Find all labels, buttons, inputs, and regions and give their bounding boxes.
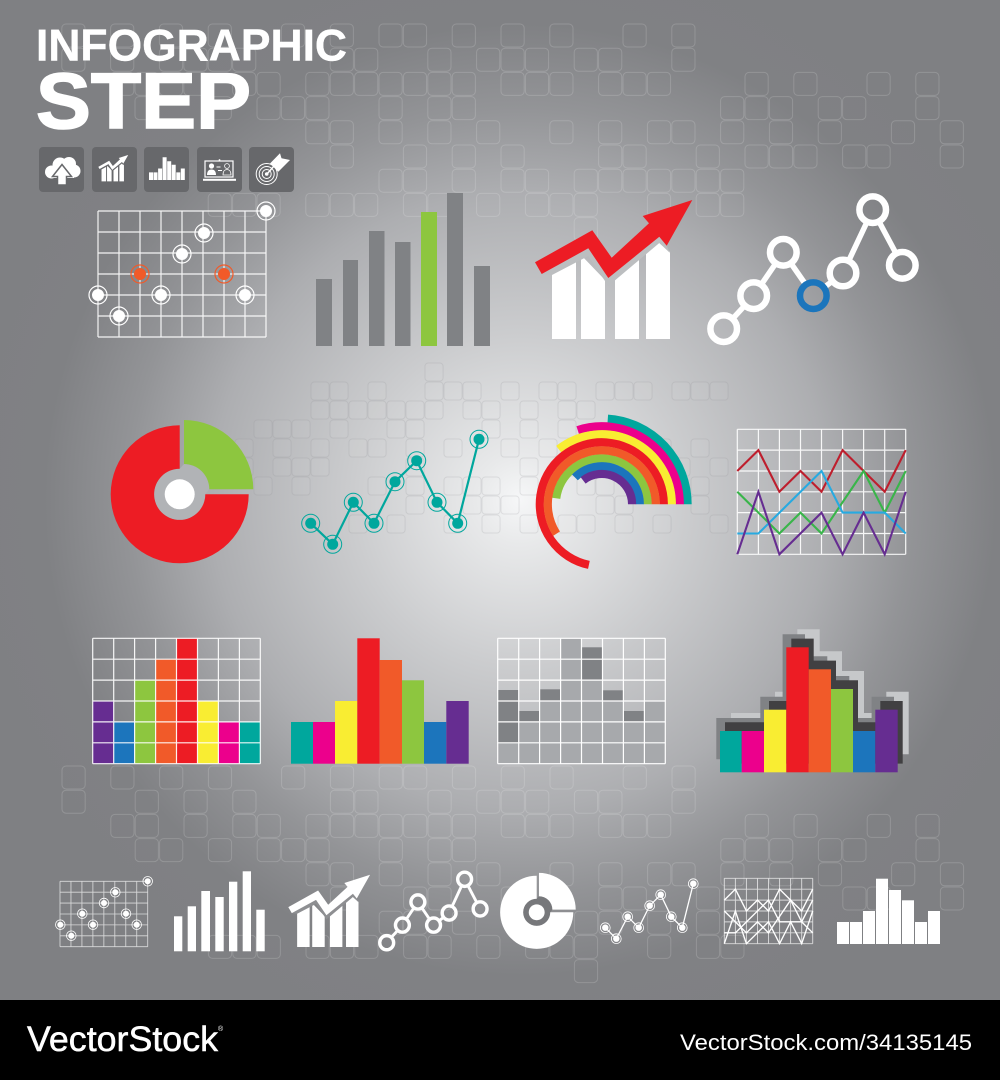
chart: ring chain line (710, 196, 916, 342)
line chart grid (737, 429, 906, 554)
chart: teal line with points (302, 430, 488, 553)
green series (737, 471, 906, 534)
dark gray tops (498, 647, 644, 743)
background pattern: top squares (62, 24, 963, 241)
icon row (39, 147, 294, 192)
chart: gray bars on grid (498, 638, 665, 764)
white rings (710, 196, 916, 342)
donut center ring (154, 464, 209, 520)
orange scatter points (131, 265, 233, 283)
dark red series (737, 450, 906, 492)
chart: colour histogram (291, 638, 469, 764)
title (36, 22, 347, 145)
white bars (552, 242, 670, 339)
footer logo text: VectorStock (27, 1020, 219, 1059)
teal line (311, 439, 479, 544)
chart: red and green donut (111, 420, 253, 563)
footer band (0, 1000, 1000, 1080)
mini icon: rising arrow chart (288, 875, 370, 947)
scatter grid lines (98, 211, 266, 337)
icon: histogram (144, 147, 189, 192)
mid shadow layer (716, 634, 894, 759)
footer registered mark: ® (218, 1025, 224, 1033)
chart: colour bars on grid (93, 638, 260, 764)
blue ring (800, 282, 827, 309)
light shadow layer (731, 629, 909, 754)
background pattern: middle squares (235, 363, 728, 533)
blue series (737, 471, 906, 534)
mini icon: bars (174, 871, 265, 951)
gray grid lines (498, 638, 665, 764)
title line: STEP: STEP (36, 56, 251, 145)
icon: laptop video call (197, 147, 242, 192)
red arrow (535, 200, 692, 278)
mini icon: ring chain (380, 872, 487, 950)
chart: layered colour bars with shadows (716, 629, 909, 772)
mini icon: line with points (600, 879, 698, 944)
dark shadow layer (725, 639, 903, 764)
mini icon: multi-line grid (724, 878, 813, 944)
arrow shadow (542, 237, 670, 286)
title line: INFOGRAPHIC: INFOGRAPHIC (36, 22, 347, 70)
chart: multi-line grid (737, 429, 906, 554)
medium gray columns (498, 638, 665, 764)
mini icon: donut (500, 873, 576, 949)
chart: scatter grid (89, 202, 275, 337)
mini icon: scatter grid (56, 876, 152, 947)
background pattern: bottom squares (62, 766, 964, 983)
purple series (737, 492, 906, 554)
teal points (305, 434, 484, 550)
icon: cloud upload (39, 147, 84, 192)
red sector (111, 425, 249, 563)
icon: rising arrow chart (92, 147, 137, 192)
colour bars (720, 647, 898, 772)
icon: target with arrow (249, 147, 294, 192)
chart: rising red arrow over bars (535, 200, 692, 339)
chart: rainbow arcs (540, 419, 688, 565)
grid colour columns (93, 638, 260, 764)
mini icon: histogram (837, 879, 940, 944)
colour grid lines (93, 638, 260, 764)
white scatter points (89, 202, 275, 325)
donut center dot (165, 479, 195, 509)
green sector (184, 420, 253, 489)
teal point rings (302, 430, 488, 553)
footer image id text: VectorStock.com/34135145 (680, 1030, 972, 1055)
chart: gray bars with green highlight (316, 193, 490, 346)
ring connectors (732, 221, 896, 319)
